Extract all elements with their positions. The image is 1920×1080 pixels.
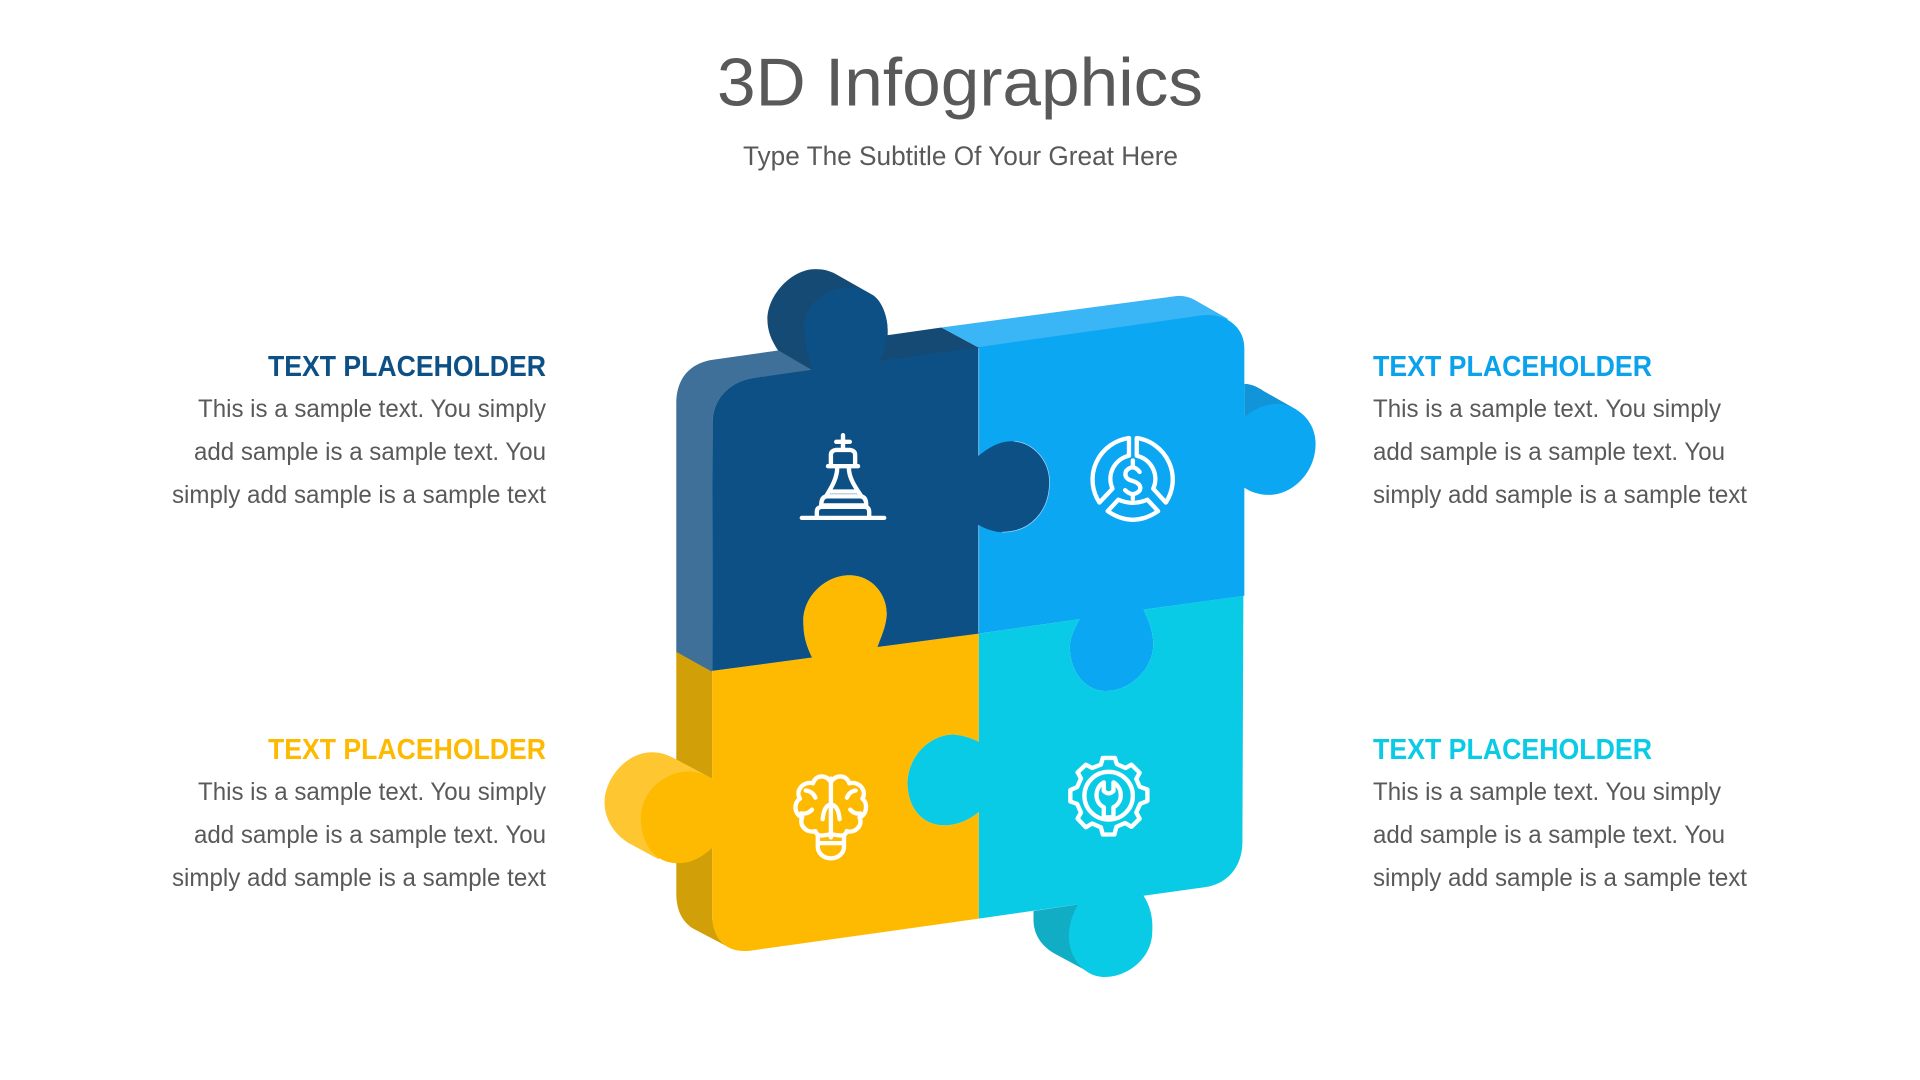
blue piece bbox=[979, 315, 1316, 691]
text block: blue top right: This is a sample text. You simply bbox=[1373, 395, 1721, 423]
navy piece side faces bbox=[676, 269, 979, 672]
title: 3D Infographics bbox=[717, 44, 1203, 120]
text block: yellow bottom left bbox=[172, 734, 546, 892]
text block: cyan bottom right: add sample is a sample text. You bbox=[1373, 821, 1725, 849]
text block: blue top right: simply add sample is a sample text bbox=[1373, 481, 1747, 509]
cyan piece side face bbox=[1034, 904, 1089, 972]
seam highlight bbox=[979, 348, 1049, 633]
text block: yellow bottom left: TEXT PLACEHOLDER bbox=[268, 734, 546, 766]
blue piece side faces bbox=[941, 296, 1297, 418]
text block: navy top left: TEXT PLACEHOLDER bbox=[268, 351, 546, 383]
icon: brain with bulb bbox=[795, 776, 866, 858]
yellow piece bbox=[641, 575, 979, 951]
text block: blue top right: TEXT PLACEHOLDER bbox=[1373, 351, 1652, 383]
text block: cyan bottom right: simply add sample is a sample text bbox=[1373, 864, 1747, 892]
subtitle: Type The Subtitle Of Your Great Here bbox=[743, 141, 1178, 171]
icon: gear with wrench bbox=[1070, 758, 1147, 834]
text block: blue top right bbox=[1373, 351, 1747, 509]
icon: chess king bbox=[802, 435, 884, 518]
text block: yellow bottom left: add sample is a sample text. You bbox=[194, 821, 546, 849]
text block: cyan bottom right: TEXT PLACEHOLDER bbox=[1373, 734, 1652, 766]
navy piece bbox=[712, 287, 1049, 671]
text block: navy top left bbox=[172, 351, 546, 509]
text block: cyan bottom right: This is a sample text. You simply bbox=[1373, 778, 1721, 806]
text block: yellow bottom left: simply add sample is a sample text bbox=[172, 864, 546, 892]
text block: blue top right: add sample is a sample text. You bbox=[1373, 438, 1725, 466]
yellow piece side faces bbox=[605, 652, 735, 951]
cyan piece bbox=[907, 596, 1243, 977]
icon: dollar target bbox=[1093, 438, 1173, 520]
text block: navy top left: This is a sample text. You simply bbox=[198, 395, 546, 423]
3D jigsaw puzzle bbox=[605, 269, 1316, 977]
text block: navy top left: add sample is a sample text. You bbox=[194, 438, 546, 466]
text block: cyan bottom right bbox=[1373, 734, 1747, 892]
text block: navy top left: simply add sample is a sample text bbox=[172, 481, 546, 509]
text block: yellow bottom left: This is a sample text. You simply bbox=[198, 778, 546, 806]
